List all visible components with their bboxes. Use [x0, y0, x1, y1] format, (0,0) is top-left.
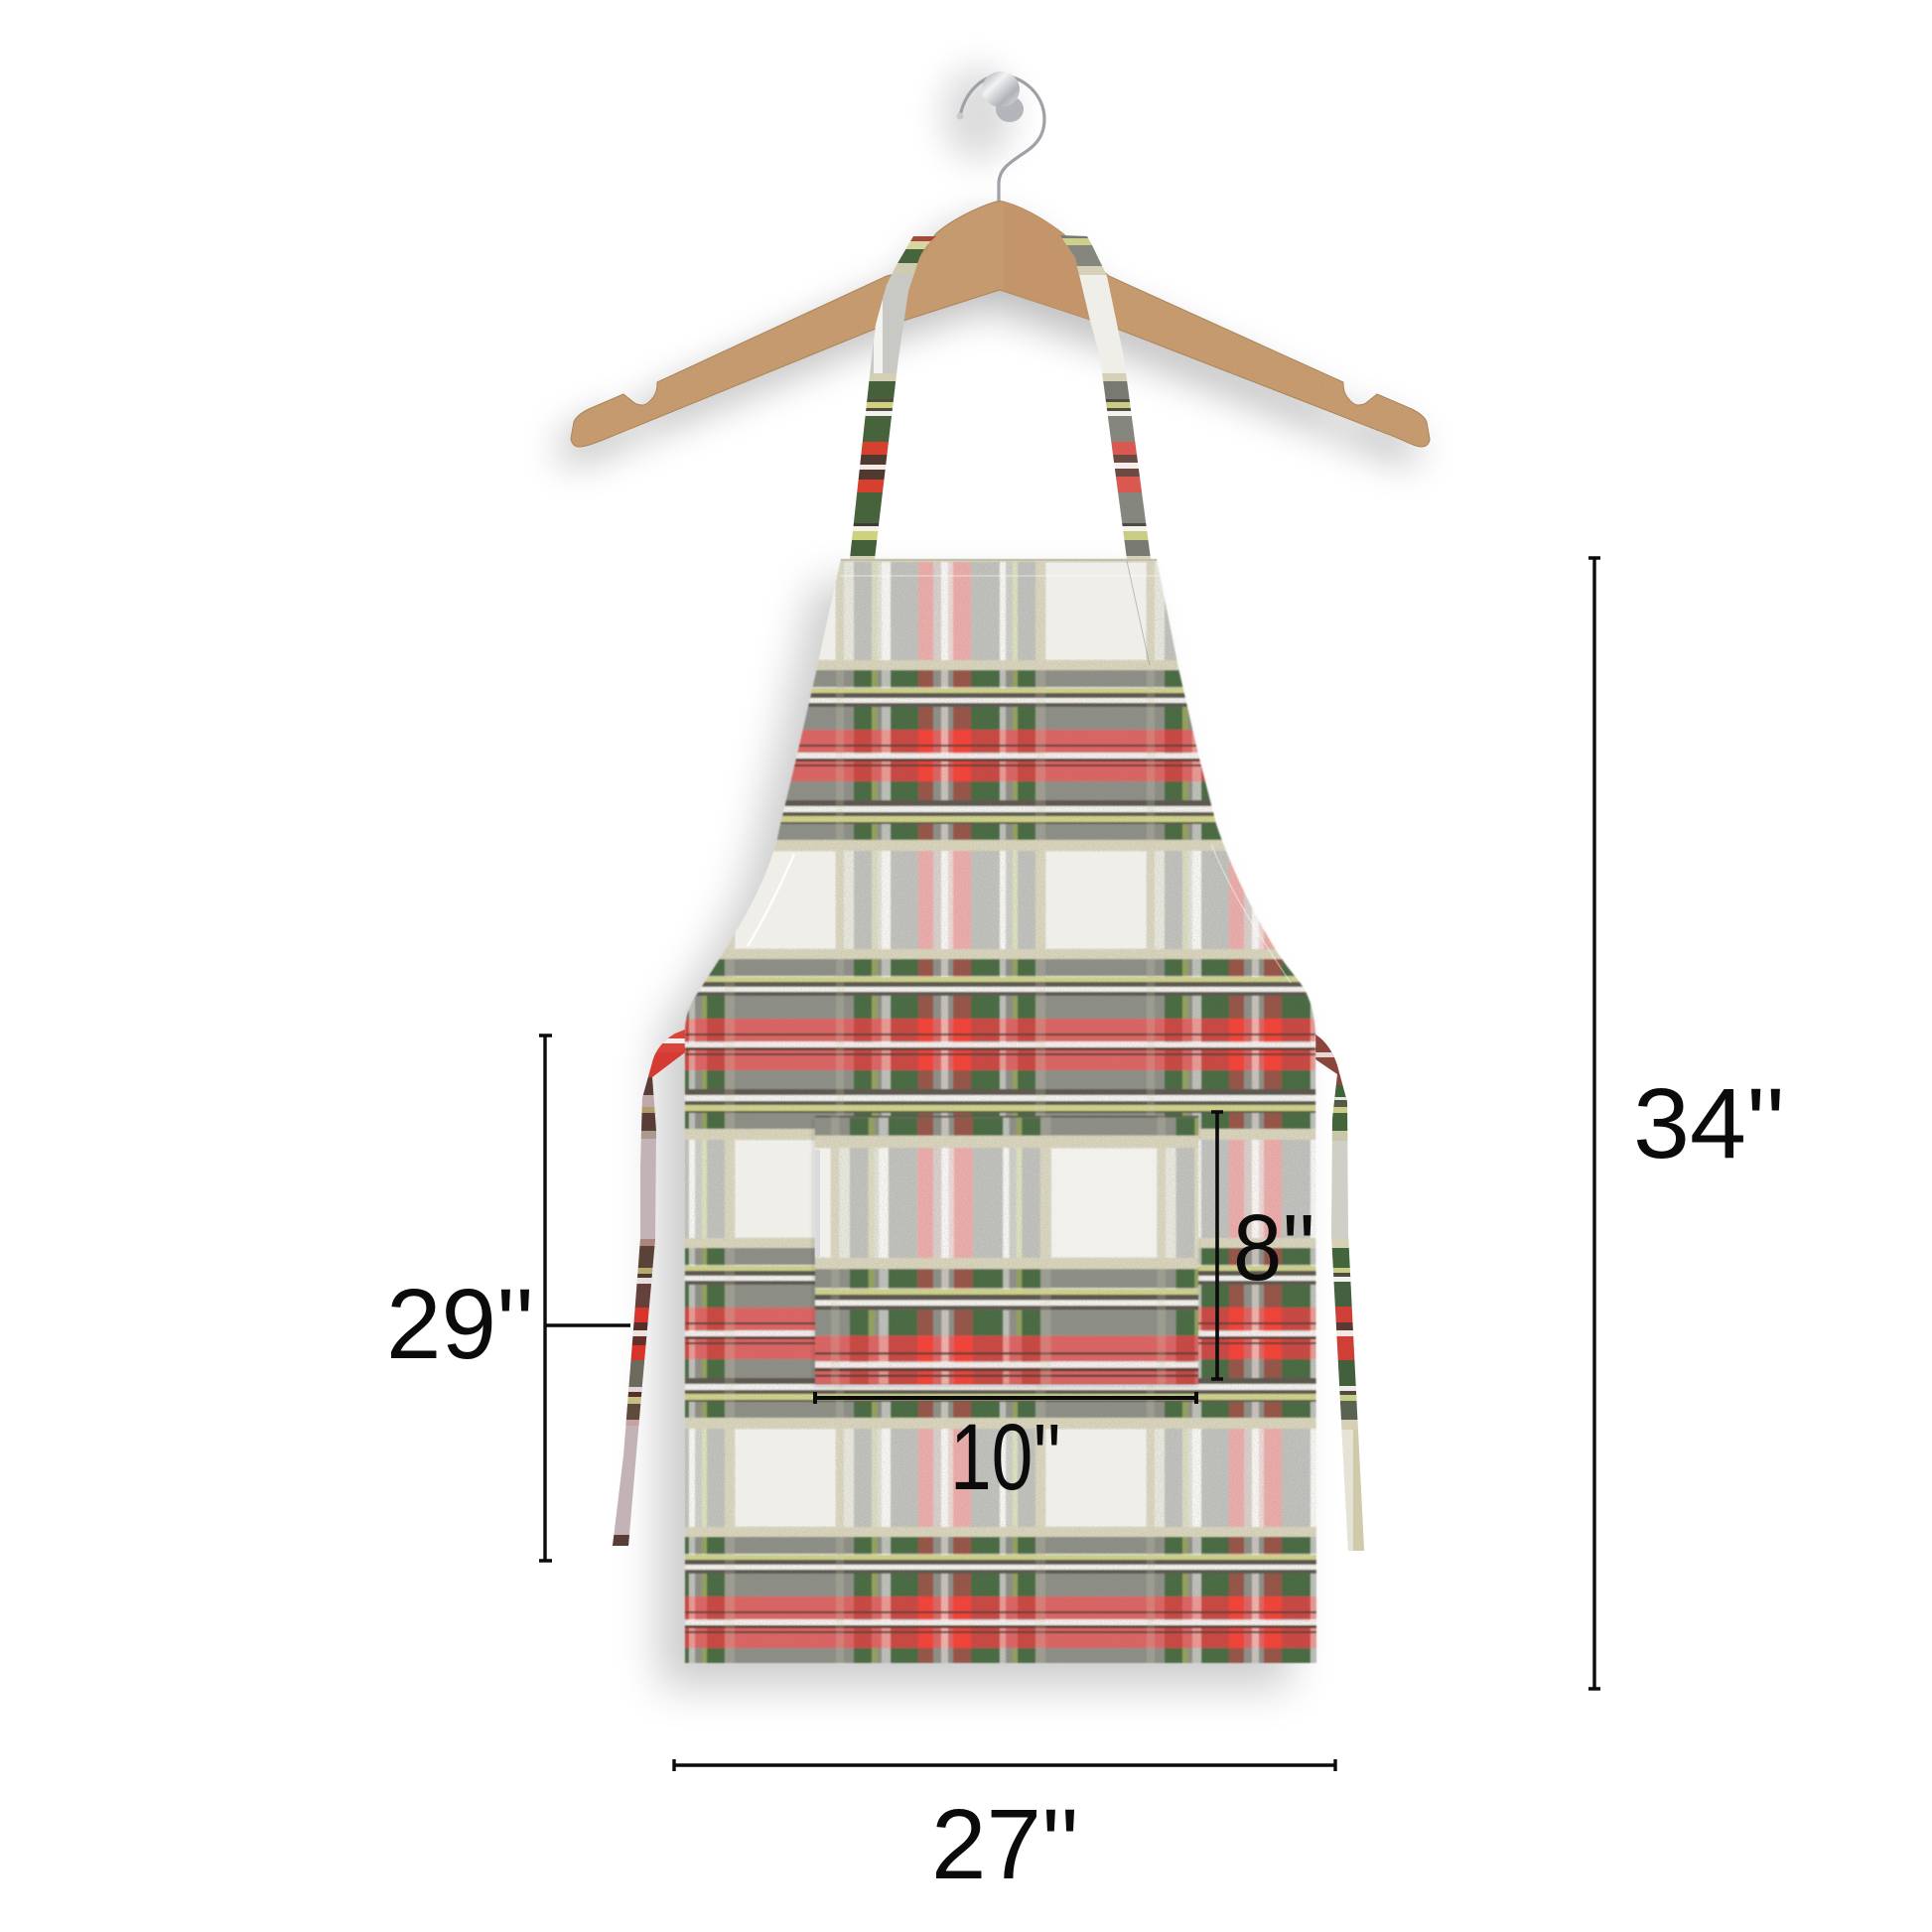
right neck strap	[1060, 235, 1151, 559]
clean white checks	[685, 559, 1316, 1663]
wooden hanger	[566, 199, 1440, 452]
apron size infographic	[391, 60, 1780, 1878]
right waist tie	[1315, 1035, 1364, 1551]
dimension: tie length 29 inches	[386, 1035, 630, 1561]
wire hook and wall knob	[957, 71, 1044, 203]
dimension: pocket width 10 inches	[815, 1392, 1196, 1510]
left waist tie	[613, 1030, 685, 1546]
dimension: overall width 27 inches	[674, 1759, 1335, 1900]
apron body with plaid fabric	[680, 556, 1325, 1668]
left neck strap	[850, 236, 936, 559]
dimension: pocket height 8 inches: 8''	[1233, 1195, 1315, 1301]
apron ties	[606, 1023, 1370, 1559]
hem and armhole seams	[748, 560, 1291, 983]
dimension: overall height 34 inches: 34''	[1633, 1068, 1785, 1179]
fabric weave texture	[680, 556, 1325, 1668]
dimension: pocket height 8 inches	[1211, 1112, 1315, 1379]
front pocket	[815, 1116, 1198, 1384]
soft drop shadows	[559, 67, 1418, 1687]
dimension: tie length 29 inches: 29''	[386, 1269, 534, 1380]
dimension: overall height 34 inches	[1588, 558, 1785, 1689]
dimension: pocket width 10 inches: 10''	[950, 1405, 1061, 1510]
dimension: overall width 27 inches: 27''	[931, 1789, 1079, 1900]
